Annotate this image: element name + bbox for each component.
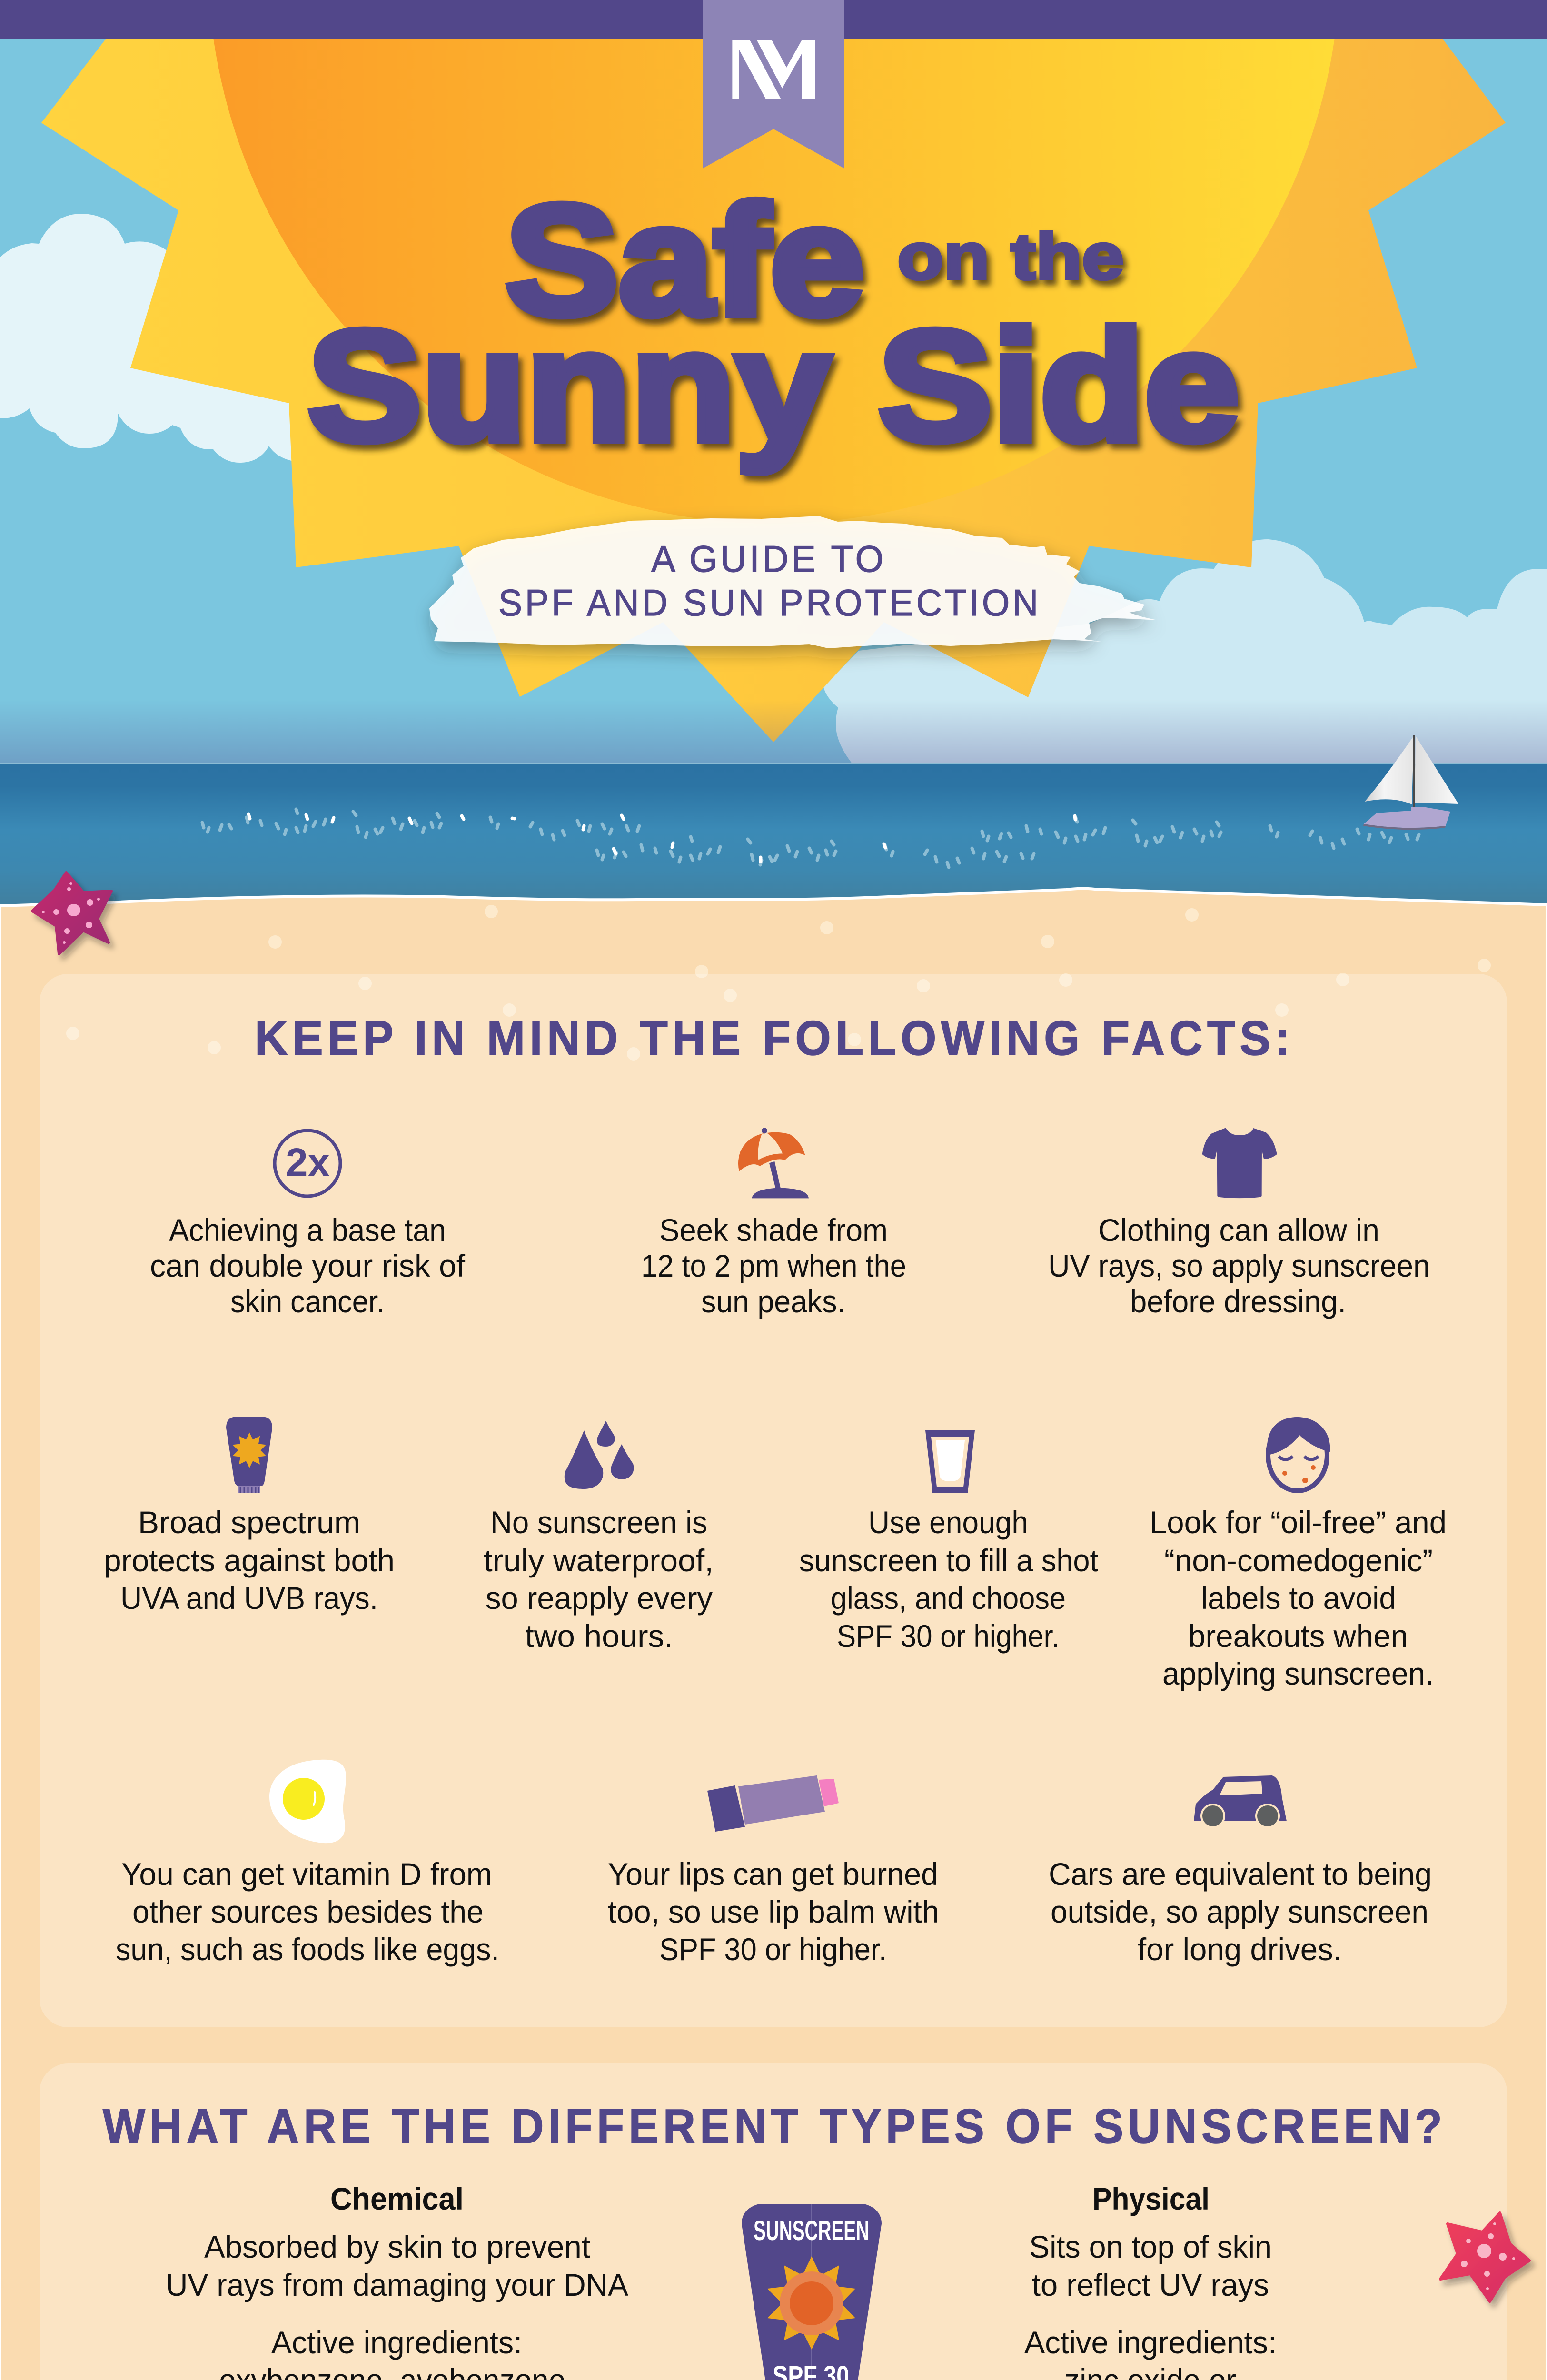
title: Safe	[505, 172, 864, 347]
fact: cars: for long drives.	[1138, 1932, 1342, 1967]
column: chemical: Absorbed by skin to prevent	[204, 2229, 590, 2264]
sea	[0, 764, 1547, 911]
starfish: magenta	[32, 873, 111, 954]
sand dots	[66, 905, 1491, 1061]
fact: lips: too, so use lip balm with	[608, 1894, 939, 1929]
panel: sunscreen types	[40, 2063, 1507, 2380]
fact: clothing	[1048, 1212, 1430, 1319]
fact: base tan: can double your risk of	[150, 1248, 466, 1283]
fact: waterproof: two hours.	[525, 1618, 673, 1654]
top banner bar	[0, 0, 1547, 39]
fact: lips: SPF 30 or higher.	[659, 1932, 887, 1967]
water sparkles	[202, 809, 1419, 867]
column: chemical: UV rays from damaging your DNA	[166, 2267, 628, 2302]
fact: vitamin D: sun, such as foods like eggs.	[116, 1932, 499, 1967]
column: physical: Sits on top of skin	[1029, 2229, 1272, 2264]
subtitle line 2: SPF AND SUN PROTECTION	[498, 582, 1041, 624]
fact: oil free: breakouts when	[1188, 1618, 1408, 1654]
fact: broad spectrum: UVA and UVB rays.	[120, 1580, 378, 1616]
fact: shot glass: glass, and choose	[831, 1580, 1066, 1616]
fact: lips: Your lips can get burned	[608, 1856, 938, 1892]
column: physical: Active ingredients:	[1024, 2325, 1277, 2360]
fact: cars	[1049, 1856, 1432, 1967]
fact: shot glass	[799, 1505, 1098, 1654]
title: on the	[897, 220, 1124, 293]
sunscreen tube	[742, 2204, 882, 2380]
fact: clothing: UV rays, so apply sunscreen	[1048, 1248, 1430, 1283]
fact: broad spectrum	[104, 1505, 395, 1616]
ribbon with logo	[703, 0, 844, 169]
icon: egg	[269, 1760, 346, 1843]
fact: broad spectrum: protects against both	[104, 1543, 395, 1578]
fact: waterproof: truly waterproof,	[484, 1543, 714, 1578]
fact: base tan: Achieving a base tan	[169, 1212, 446, 1248]
cloud: right	[823, 539, 1547, 764]
fact: oil free: labels to avoid	[1201, 1580, 1396, 1616]
heading: facts: KEEP IN MIND THE FOLLOWING FACTS:	[255, 1011, 1295, 1065]
heading: types: WHAT ARE THE DIFFERENT TYPES OF SUNSCREEN?	[103, 2099, 1447, 2153]
column: physical: to reflect UV rays	[1032, 2267, 1269, 2302]
fact: clothing: before dressing.	[1130, 1284, 1346, 1319]
icon: 2x: 2x	[286, 1140, 330, 1185]
fact: shade	[641, 1212, 906, 1319]
icon: beach umbrella	[738, 1128, 809, 1198]
fact: base tan: skin cancer.	[230, 1284, 385, 1319]
sky background	[0, 0, 1547, 764]
title	[307, 172, 1240, 474]
fact: shot glass: SPF 30 or higher.	[837, 1618, 1060, 1654]
sunscreen tube: SUNSCREEN	[754, 2215, 869, 2246]
fact: cars: Cars are equivalent to being	[1049, 1856, 1432, 1892]
fact: oil free: “non-comedogenic”	[1164, 1543, 1433, 1578]
fact: waterproof: No sunscreen is	[490, 1505, 707, 1540]
sailboat	[1363, 735, 1458, 830]
column: physical	[1024, 2181, 1277, 2380]
fact: shade: 12 to 2 pm when the	[641, 1248, 906, 1283]
subtitle brush banner	[429, 516, 1157, 648]
icon: sunscreen tube small	[226, 1417, 272, 1493]
column: chemical: Active ingredients:	[271, 2325, 522, 2360]
fact: broad spectrum: Broad spectrum	[138, 1505, 360, 1540]
fact: waterproof	[484, 1505, 714, 1654]
icon: water drops	[565, 1421, 634, 1489]
horizon haze	[0, 700, 1547, 764]
fact: cars: outside, so apply sunscreen	[1051, 1894, 1428, 1929]
sun with rays	[41, 0, 1506, 742]
fact: oil free: Look for “oil-free” and	[1150, 1505, 1447, 1540]
icon: shot glass	[925, 1430, 975, 1493]
fact: vitamin D: You can get vitamin D from	[121, 1856, 492, 1892]
icon: t-shirt	[1202, 1128, 1277, 1198]
fact: shot glass: Use enough	[868, 1505, 1028, 1540]
fact: shot glass: sunscreen to fill a shot	[799, 1543, 1098, 1578]
column: chemical	[166, 2181, 628, 2380]
starfish: pink	[1440, 2213, 1529, 2301]
fact: shade: sun peaks.	[701, 1284, 845, 1319]
sand beach	[0, 889, 1547, 2380]
fact: shade: Seek shade from	[659, 1212, 888, 1248]
fact: base tan	[150, 1212, 466, 1319]
column: physical: Physical	[1092, 2181, 1210, 2216]
fact: vitamin D	[116, 1856, 499, 1967]
column: chemical: Chemical	[330, 2181, 464, 2216]
fact: oil free	[1150, 1505, 1447, 1691]
icon: lip balm	[707, 1775, 839, 1832]
title: Sunny Side	[307, 298, 1240, 474]
icon: face with breakouts	[1267, 1417, 1330, 1491]
icon: 2x	[275, 1130, 340, 1196]
cloud: left	[0, 214, 333, 463]
fact: vitamin D: other sources besides the	[132, 1894, 484, 1929]
fact: waterproof: so reapply every	[486, 1580, 713, 1616]
fact: clothing: Clothing can allow in	[1098, 1212, 1379, 1248]
subtitle line 1: A GUIDE TO	[651, 538, 886, 580]
icon: car	[1194, 1775, 1287, 1827]
fact: oil free: applying sunscreen.	[1162, 1656, 1434, 1691]
fact: lips	[608, 1856, 939, 1967]
panel: facts	[40, 974, 1507, 2027]
